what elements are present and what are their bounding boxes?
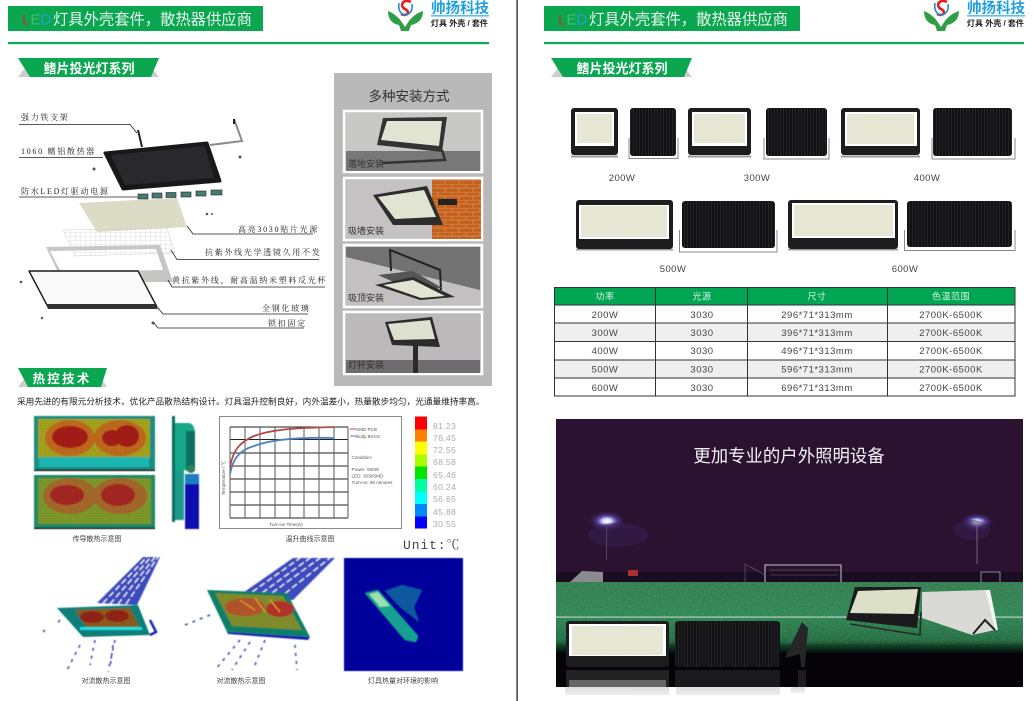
table grid [554,288,1015,396]
row 400W: 496*71*313mm [781,346,853,357]
row 300W: 396*71*313mm [781,328,853,339]
row 200W [592,310,983,321]
chart legend: Power: 600W [352,467,380,472]
night sky [556,419,1023,582]
chart legend: Body BACK [356,434,381,439]
row 200W: 200W [592,310,618,321]
row 300W: 3030 [690,328,714,339]
caption: convection back: 对流散热示意图 [216,676,266,685]
axis titles [221,460,303,527]
label: 300W: 300W [744,173,770,184]
row 400W: 400W [592,346,618,357]
label: driver [19,186,140,197]
label: lens [171,247,321,260]
right section title: 鳍片投光灯系列 [576,61,668,76]
label: heat sink: 1060 鳍铝散热器 [21,146,96,156]
lamp: 300W front [688,108,751,158]
lamp: 300W back [764,108,829,159]
label: 500W: 500W [660,264,686,275]
stadium light left [587,510,648,560]
right logo: 灯具 外壳 / 套件 [967,18,1024,28]
left logo [388,0,489,31]
label: bracket [19,112,137,133]
unit label: Unit:℃ [403,538,460,553]
section title: thermal control: 热控技术 [33,371,91,386]
temperature colour scale: 65.46 [433,470,456,480]
lamp: 500W back [680,201,777,252]
row 300W: 300W [592,328,618,339]
temperature colour scale: 60.24 [433,482,456,492]
pitch line [556,616,1023,618]
label: driver: 防水LED灯驱动电源 [21,186,110,196]
table header row [554,287,1015,305]
card: pole mount: 灯杆安装 [348,359,384,370]
photo lamp: large front [566,621,669,687]
row 600W: 2700K-6500K [919,383,983,394]
temperature colour scale: 30.55 [433,519,456,529]
right header banner: 灯具外壳套件，散热器供应商 [589,8,788,30]
photo lamp: large back [675,621,780,687]
table header row: 功率 [595,290,615,302]
caption: temperature curve: 温升曲线示意图 [286,534,334,543]
photo lamp: black front [846,587,921,635]
lamp: 600W back [904,201,1015,250]
grass texture [556,582,1023,644]
table stripes [554,323,1015,378]
grass field [556,582,1023,654]
label: clip [154,318,307,328]
label: 400W: 400W [914,173,940,184]
heat map: front view [34,416,155,471]
part: heat sink [105,143,220,189]
section title: thermal control [18,368,107,387]
label: lens: 抗紫外线光学透镜久用不发 [205,247,321,257]
caption: conduction: 传导散热示意图 [72,534,122,543]
goal net and stands [745,564,838,582]
lamp: 200W back [629,108,678,158]
row 500W: 596*71*313mm [781,364,853,376]
heat map: back view [34,475,155,529]
part: LED board [79,198,187,232]
goal right [981,572,1000,582]
section title: fin floodlight series [18,58,159,77]
chart grid [230,427,348,518]
temperature colour scale [415,416,456,529]
goal left [570,571,603,582]
row 600W: 696*71*313mm [781,383,853,394]
chart legend: Turn-on: 60 minutes [352,480,393,485]
table header row: 尺寸 [807,290,827,302]
photo title: 更加专业的户外照明设备 [693,446,885,466]
temperature colour scale: 68.58 [433,457,456,467]
photo lamp: white rear [922,590,998,635]
dark foreground [556,654,1023,687]
lamp: 400W front [841,108,920,158]
label: LED source [187,224,319,234]
part: lens [63,228,175,256]
label: glass [158,303,310,314]
panel title: 多种安装方式 [368,88,450,104]
simulation: convection front [43,557,160,672]
chart legend: SMD PCB [356,427,377,432]
left header banner: 灯具外壳套件，散热器供应商 [53,8,252,30]
temperature colour scale: 56.65 [433,494,456,504]
row 500W: 500W [592,364,618,376]
lamp: 400W back [932,108,1015,159]
chart legend [350,427,393,485]
card: wall mount: 吸墙安装 [348,225,384,236]
row 400W [592,346,983,357]
left header rule [8,42,489,44]
row 300W [592,328,983,339]
goal centre [765,565,841,582]
right header banner: LED [558,12,587,28]
fence and horizon [556,572,1023,582]
axis titles: Temperature / ℃ [221,460,226,495]
left header banner [8,6,263,31]
card: wall mount [344,178,482,240]
row 500W [592,364,983,376]
row 600W: 600W [592,383,618,394]
temperature colour scale: 81.23 [433,421,456,431]
page divider [516,0,518,701]
table header row: 色温范围 [932,290,970,302]
lamp: 600W front [788,200,898,250]
temperature colour scale: 45.88 [433,507,456,517]
right section title [551,58,692,77]
right logo: 帅扬科技 [967,0,1025,17]
card: pole mount [344,312,482,374]
row 200W: 2700K-6500K [919,310,983,321]
label: glass: 全钢化玻璃 [262,303,310,313]
temperature colour scale: 76.45 [433,433,456,443]
label: reflector: 黄抗紫外线，耐高温纳米塑料反光杯 [172,275,327,286]
right header rule [544,42,1024,44]
heat map: side view [172,416,199,529]
card: ceiling mount [344,245,482,307]
row 500W: 3030 [690,364,714,376]
part: mounting bracket [138,119,242,147]
chart: temperature rise curve [220,416,402,528]
card: ceiling mount: 吸顶安装 [348,292,384,303]
part: tempered glass [29,271,158,309]
specification table [554,287,1015,396]
part: reflector [46,245,173,283]
chart legend: LED: 3030SMD [352,474,384,478]
row 200W: 296*71*313mm [781,310,853,321]
curve: SMD PCB [230,427,334,467]
axis titles: Turn-on Time(S) [269,522,303,527]
label: LED source: 高亮3030贴片光源 [238,224,319,234]
panel: installation methods [334,73,492,386]
photo lamp: side profile [785,622,808,687]
row 500W: 2700K-6500K [919,364,983,376]
temperature colour scale: 72.55 [433,445,456,455]
thermal description: 采用先进的有限元分析技术，优化产品散热结构设计。灯具温升控制良好，内外温差小，热量散步均匀，光通量维持率高。 [17,396,484,408]
chart legend: Condition: [352,455,372,460]
caption: ambient effect: 灯具热量对环境的影响 [368,676,438,685]
row 300W: 2700K-6500K [919,328,983,339]
row 400W: 3030 [690,346,714,357]
lamp: 200W front [571,108,618,158]
row 600W: 3030 [690,383,714,394]
photo: stadium at night [556,419,1023,687]
left header banner: LED [22,12,51,28]
left logo: 帅扬科技 [431,0,489,17]
part: small screws [20,156,242,324]
curve: Body BACK [230,438,334,474]
product reflection under photo [565,687,805,695]
simulation: convection back [185,558,335,670]
card: ground mount [344,111,482,172]
label: 200W: 200W [609,173,635,184]
red sign [628,570,638,576]
label: clip: 锁扣固定 [268,318,307,328]
stadium light right [954,512,995,564]
label: heat sink [19,146,103,158]
right header banner [544,6,800,31]
right logo [924,0,1025,31]
row 400W: 2700K-6500K [919,346,983,357]
row 600W [592,383,983,394]
table header row: 光源 [692,290,712,302]
section title: fin floodlight series: 鳍片投光灯系列 [43,61,135,76]
label: bracket: 强力铁支架 [21,112,70,122]
part: driver modules [138,190,222,199]
label: 600W: 600W [892,264,918,275]
card: ground mount: 落地安装 [348,158,384,169]
exploded product diagram [19,112,327,328]
simulation: ambient effect [344,558,463,671]
lamp: 500W front [576,200,673,250]
left logo: 灯具 外壳 / 套件 [431,18,488,28]
caption: convection front: 对流散热示意图 [82,676,130,685]
row 200W: 3030 [690,310,714,321]
